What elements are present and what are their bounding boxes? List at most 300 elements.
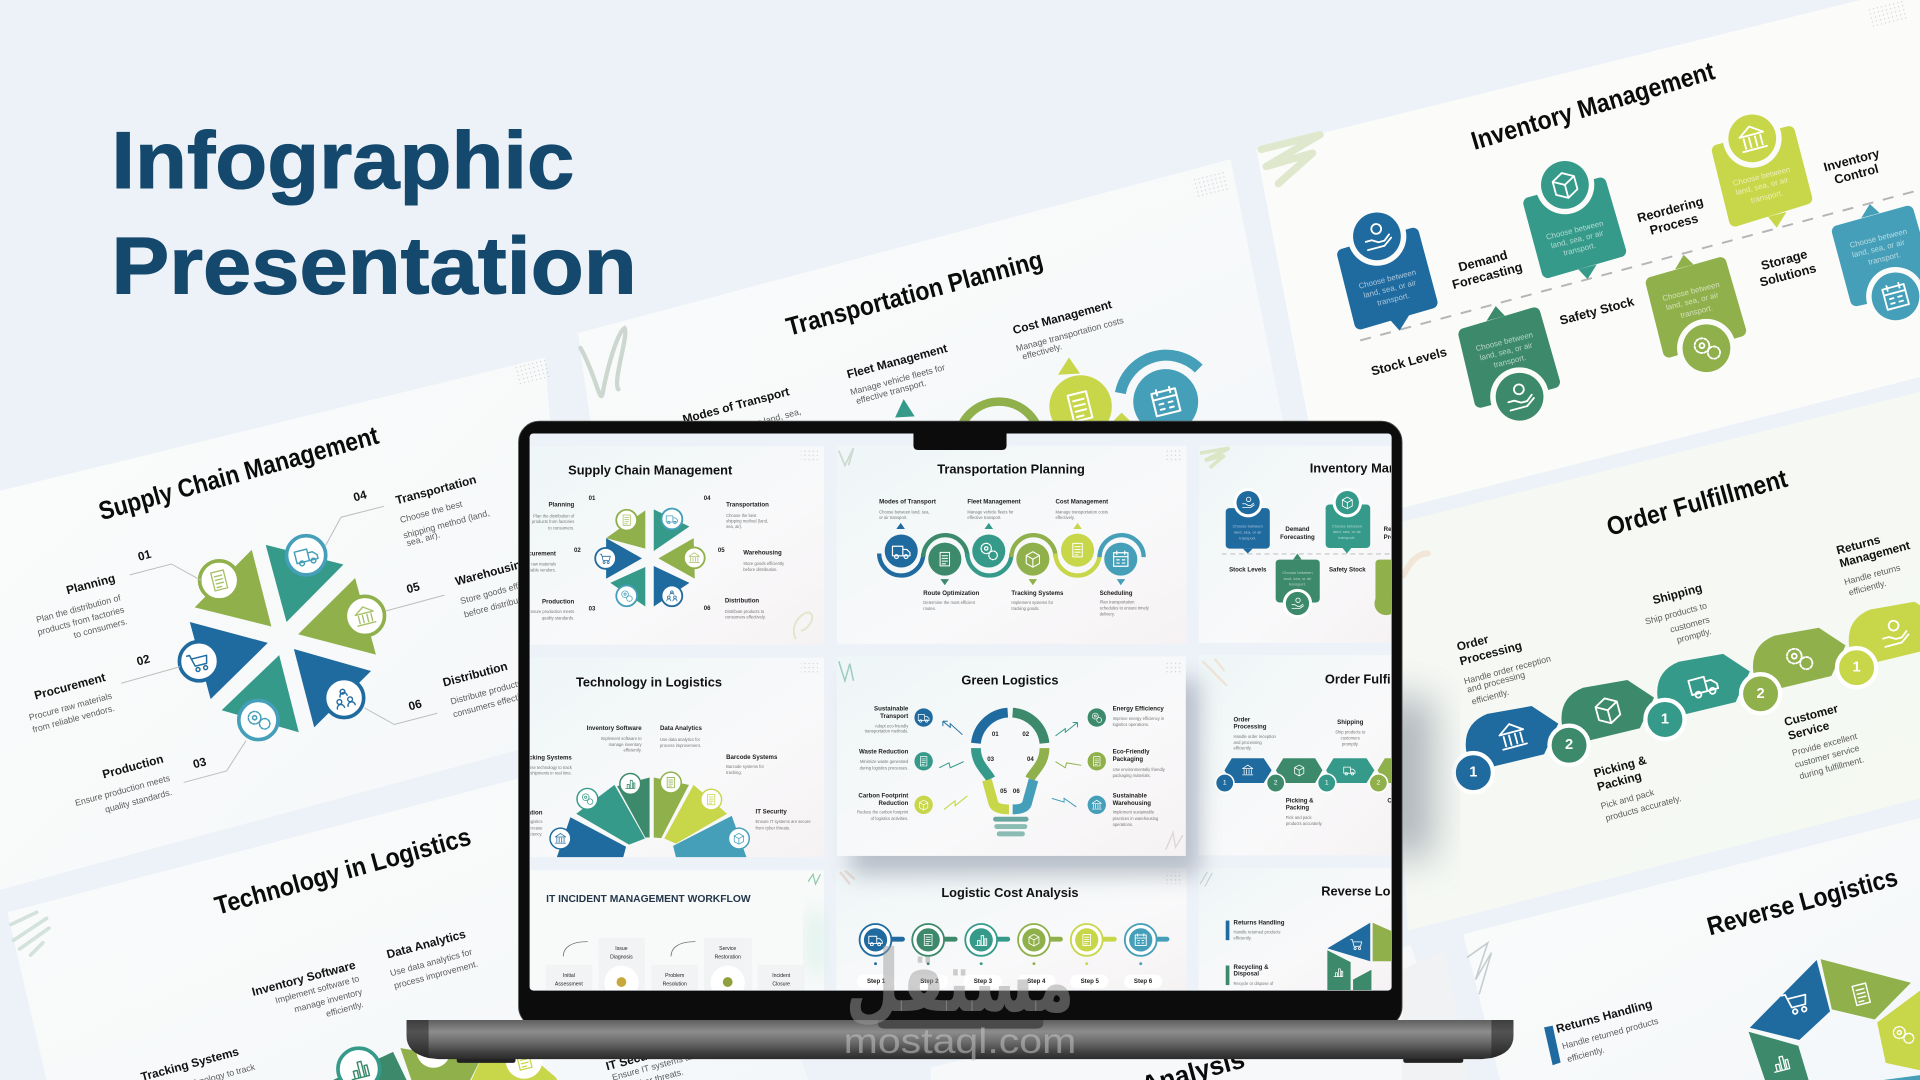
card labels: Storage [1759,246,1809,273]
labels: 04 [704,495,711,502]
top labels: Choose between land, sea, [879,509,930,514]
slide: logistic cost analysis [836,868,1187,993]
labels: promptly. [1342,741,1359,746]
step text: during fulfillment. [1798,754,1865,781]
item text: IT Security [604,1044,667,1073]
labels: from cyber threats. [756,825,790,830]
labels: right column: before distribution. [463,591,535,620]
labels: left column: 03 [191,754,208,771]
fan diagram segments [333,1033,557,1080]
labels: right column: Distribution [441,659,509,690]
laptop base notch [878,1020,1043,1029]
workflow boxes: Service [719,946,736,952]
labels: Safety Stock [1329,567,1366,574]
card: blue: land, sea, or air [1363,278,1417,300]
labels: Processing [1234,724,1267,731]
workflow boxes: Restoration [715,955,741,961]
workflow boxes: Closure [772,981,790,987]
heading: IT INCIDENT MANAGEMENT WORKFLOW [546,894,751,905]
camera notch [913,433,1007,450]
pale slide corner [1402,950,1469,1080]
step text: Order [1455,632,1490,654]
slide: technology in logistics [509,658,824,857]
card: lime: land, sea, or air [1735,175,1790,197]
top labels: Manage vehicle fleets for [967,509,1014,514]
labels: Barcode systems for [726,764,765,769]
labels: right column: 04 [352,487,369,504]
step text: products accurately. [1604,793,1682,823]
top labels: Modes of Transport [879,499,936,506]
labels: Plan the distribution of [533,513,575,518]
item text: Modes of Transport [681,384,791,426]
labels: Use technology to track [528,765,573,770]
heading: Transportation Planning [783,246,1046,342]
labels: Packing [1286,804,1309,811]
right labels: Improve energy efficiency in [1113,716,1165,721]
labels: Store goods efficiently [743,561,785,566]
step text: Management [1838,538,1912,570]
card: green [1652,255,1740,378]
hub [595,509,705,606]
labels: quality standards. [542,615,574,620]
labels: right column: Distribute products to [449,675,532,706]
bottom labels: Implement systems for [1011,600,1054,605]
panel: inventory management [1256,0,1920,527]
card labels: Process [1648,210,1700,238]
main title: Presentation [111,221,637,311]
labels: Handle order reception [1234,734,1277,739]
steps: Step 1 [867,978,886,985]
screen content [530,446,1392,990]
labels: Picking & [1286,797,1314,804]
top labels: Manage transportation costs [1056,509,1108,514]
cards [1222,488,1400,618]
right labels: Use environmentally friendly [1113,767,1166,772]
heading: Transportation Planning [937,461,1085,476]
step text: Returns [1835,532,1882,557]
fan [550,772,749,857]
labels: left column [28,547,208,815]
number badges: 1 [1852,660,1861,676]
labels: Use data analytics for [660,737,701,742]
cards: Choose between [1233,524,1263,529]
steps: Step 5 [1081,978,1100,985]
labels: left column: Production [101,752,165,781]
item text: efficiently. [325,999,364,1019]
bulb numbers: 04 [1027,756,1034,763]
hub of six triangles [190,545,376,732]
heading: Reverse Logistics [1704,864,1901,941]
card: green: Choose between [1661,280,1721,303]
left labels: transportation methods. [865,729,908,734]
labels: efficiency. [524,831,543,836]
hexagon segments [1749,959,1920,1080]
labels: before distribution. [743,567,777,572]
labels: Procurement [518,550,556,557]
slide: inventory management [1199,446,1392,643]
heading: Inventory Management [1310,461,1450,476]
labels: efficiently. [624,748,642,753]
labels: left column: Ensure production meets [74,773,172,808]
labels: Choose the best [726,513,757,518]
item text: Fleet Management [845,341,949,381]
card: blue [1343,207,1431,331]
bottom labels: schedules to ensure timely [1100,606,1150,611]
labels: left column: Procure raw materials [28,690,114,722]
top labels: Fleet Management [967,499,1021,506]
item text: Choose between land, sea, [697,406,802,444]
bottom labels: delivery. [1100,612,1115,617]
decorative scribble [580,328,625,396]
card: cyan [1838,204,1920,326]
labels: Forecasting [1280,534,1315,541]
step text: Ship products to [1644,600,1708,627]
item text: Cost Management [1011,297,1113,337]
step text: efficiently. [1848,578,1887,598]
item text: Manage transportation costs [1015,315,1125,353]
labels: Automation [509,810,543,817]
heading: Supply Chain Management [568,463,733,478]
hexagon [1327,923,1396,992]
steps [857,924,1167,988]
heading: Order Fulfillment [1604,465,1791,542]
step text: Packing [1595,769,1643,794]
list: Recycling & [1234,964,1269,971]
step text: efficiently. [1470,687,1510,707]
cards: Choose between [1332,524,1362,529]
labels: Stock Levels [1229,567,1267,574]
labels: Customer [1387,797,1416,804]
labels: left column: quality standards. [104,787,173,815]
card labels: Safety Stock [1558,293,1636,328]
chain: 2 [1274,780,1278,787]
labels: 05 [718,547,725,554]
card: lime: Choose between [1732,165,1791,188]
labels: IT Security [756,808,787,815]
laptop feet [457,1053,1463,1063]
labels: left column: Procurement [33,670,107,703]
labels: to increase [522,825,543,830]
labels: Tracking Systems [520,754,572,761]
workflow boxes: Resolution [663,981,687,987]
process chevrons [1466,602,1920,767]
step text: Handle returns [1843,562,1902,587]
right labels: practices in warehousing [1113,816,1159,821]
card: teal: Choose between [1545,219,1604,242]
bottom labels: Scheduling [1100,590,1133,597]
item text: Implement software to [274,973,360,1005]
item text: Manage vehicle fleets for [849,362,946,397]
labels: products from factories [532,519,574,524]
watermark [844,932,1076,1061]
bottom labels: routes. [923,606,936,611]
labels [509,725,811,836]
labels: Demand [1285,526,1310,533]
step text: Shipping [1651,581,1704,607]
icon circles [179,536,384,740]
list: Recycle or dispose of [1234,981,1274,986]
step text: Service [1786,718,1831,743]
chain [1216,758,1396,792]
heading: Logistic Cost Analysis [941,885,1079,900]
left labels: Minimize waste generated [860,759,909,764]
panel: logistic cost analysis [931,945,1457,1080]
slide: order fulfillment [1200,656,1391,855]
labels: 02 [574,547,581,554]
slide: it incident management workflow [530,870,824,1000]
left labels: Reduce the carbon footprint [857,809,909,814]
labels: Data Analytics [660,725,702,732]
labels: process improvement. [660,743,701,748]
heading: Green Logistics [961,673,1058,688]
number badges: 1 [1661,712,1669,728]
item text [681,297,1125,444]
slide: transportation planning [837,446,1187,644]
labels: left column: from reliable vendors. [31,703,116,735]
card labels: Reordering [1635,193,1705,225]
workflow boxes: Assessment [555,981,583,987]
cards: transport. [1338,535,1355,540]
workflow boxes: Incident [772,973,791,979]
card: dark green [1464,306,1554,426]
card labels: Demand [1457,247,1509,275]
returns handling item [1544,997,1660,1065]
slide: green logistics [837,656,1200,876]
labels: shipping method (land, [726,519,768,524]
chain: 2 [1377,780,1381,787]
chain: 1 [1325,780,1329,787]
labels: to consumers. [548,525,574,530]
labels: left column: 01 [136,547,153,564]
returns handling item: Returns Handling [1555,997,1654,1036]
labels [515,495,785,620]
workflow boxes: Issue [615,946,628,952]
left labels: Reduction [878,800,909,807]
left labels: Adopt eco-friendly [875,723,909,728]
returns handling item: efficiently. [1566,1044,1606,1064]
left labels: Waste Reduction [859,749,909,756]
card labels: Stock Levels [1369,344,1448,379]
right labels: packaging materials. [1113,773,1151,778]
labels: Ensure production meets [528,609,574,614]
labels: Barcode Systems [726,754,778,761]
labels: tracking. [726,770,742,775]
workflow boxes: Diagnosis [610,955,633,961]
item text: manage inventory [293,986,364,1014]
list: Returns Handling [1234,919,1285,926]
card: cyan: Choose between [1849,227,1908,250]
right labels: Energy Efficiency [1113,705,1164,712]
left labels [857,705,909,821]
right labels: Packaging [1113,756,1143,763]
labels: right column: Warehousing [454,556,529,588]
left labels: of logistics activities. [871,816,908,821]
labels [1234,717,1391,826]
card: cyan: land, sea, or air [1851,238,1906,259]
bulb numbers: 01 [992,731,999,738]
step text: Picking & [1592,753,1648,780]
left labels: Sustainable [874,705,909,712]
labels: 01 [589,495,596,502]
workflow boxes [554,941,790,987]
laptop base [407,1020,1513,1059]
labels: products accurately. [1286,821,1323,826]
cards: land, sea, or air [1234,530,1262,535]
labels: Transportation [726,501,769,508]
labels: consumers effectively. [725,615,766,620]
card: teal [1529,156,1620,279]
card: green: land, sea, or air [1665,290,1720,312]
step text: customers [1669,614,1711,635]
labels: right column: 06 [407,696,424,713]
right labels: Warehousing [1113,800,1151,807]
labels: left column: Planning [65,571,117,597]
labels: Production [542,598,575,605]
right labels: Eco-Friendly [1113,749,1150,756]
top labels: effective transport. [967,515,1001,520]
left labels: Transport [880,713,908,720]
list: Disposal [1234,971,1259,978]
card: dark green: transport. [1493,353,1527,370]
icon circles and arrows [914,708,1106,814]
bulb numbers: 03 [987,756,995,763]
laptop base end shading [407,1020,1513,1058]
card: blue: Choose between [1358,268,1417,291]
item text [139,927,698,1080]
laptop lid [519,421,1402,1027]
returns handling item: Handle returned products [1561,1016,1660,1051]
cards: transport. [1239,536,1256,541]
labels: sea, air). [726,524,742,529]
workflow boxes: Initial [563,973,575,979]
item text: Data Analytics [385,927,468,961]
heading: Reverse Logistics [1321,884,1431,899]
chain: 1 [1223,780,1227,787]
labels: Ship products to [1335,729,1366,734]
bottom labels: Tracking Systems [1011,590,1064,597]
list: efficiently. [1234,936,1252,941]
slide: supply chain management [515,446,824,645]
laptop [407,421,1513,1063]
bulb numbers: 02 [1022,731,1030,738]
bulb numbers: 05 [1000,788,1007,795]
main title [111,116,637,311]
item text: effectively. [1021,341,1063,362]
labels: right column: consumers effectively. [452,687,538,719]
item text: effective transport. [855,378,927,406]
labels: efficiently. [1234,745,1252,750]
labels: left column: products from factories [36,604,126,637]
card: cyan: transport. [1867,250,1902,267]
labels: Implement software to [601,736,642,741]
right labels [1113,705,1166,827]
bulb numbers [987,731,1034,795]
right labels: operations. [1113,822,1133,827]
labels: right column: Transportation [394,472,478,507]
labels: Use logistics [519,819,542,824]
cards: transport. [1289,581,1306,586]
labels: right column: shipping method (land, [402,508,491,540]
step text: Provide excellent [1791,731,1859,758]
bulb numbers: 06 [1013,788,1020,795]
step text: Processing [1458,638,1523,668]
decorative scribble [1403,553,1428,576]
heading: Order Fulfillment [1325,672,1429,687]
card: dark green: Choose between [1475,330,1534,353]
workflow boxes: Problem [665,973,684,979]
card: lime [1718,109,1806,228]
decorative scribble [11,912,49,955]
steps: Step 4 [1027,978,1046,985]
decorative scribble [1467,943,1491,994]
step text: promptly. [1676,626,1712,645]
cards: land, sea, or air [1333,529,1361,534]
labels: from reliable vendors. [516,567,556,572]
card: blue: transport. [1376,291,1411,308]
slide: reverse logistics [1199,868,1392,990]
steps: Step 3 [974,978,993,985]
labels: left column: to consumers. [72,616,128,640]
lightbulb [976,713,1044,809]
panel: reverse logistics [1463,818,1920,1080]
main title: Infographic [111,116,574,206]
card labels [1369,145,1881,379]
labels: and processing [1234,740,1262,745]
step text: customer service [1794,743,1860,770]
item text: Use data analytics for [389,947,473,978]
right labels: logistics operations. [1113,722,1149,727]
timeline [879,523,1144,585]
step text: and processing [1466,669,1526,695]
bottom labels: Plan transportation [1100,600,1135,605]
labels: Distribution [725,597,759,604]
bottom labels: Route Optimization [923,590,980,597]
list [1226,919,1285,986]
cards: land, sea, or air [1284,576,1312,581]
top labels: Cost Management [1056,499,1108,506]
labels: 06 [704,605,711,612]
step text: Pick and pack [1600,787,1656,811]
steps: Step 2 [920,978,939,985]
labels: right column [352,472,546,719]
card labels: Solutions [1758,260,1818,290]
labels: Inventory Software [587,725,642,732]
card: lime: transport. [1750,188,1784,205]
card: dark green: land, sea, or air [1479,340,1534,362]
labels: Reordering [1384,526,1417,533]
list: Handle returned products [1234,930,1280,935]
labels: shipments in real time. [530,771,572,776]
steps: Step 6 [1134,978,1153,985]
panel: supply chain management [0,358,576,891]
bottom labels: tracking goods. [1011,606,1040,611]
labels: Warehousing [743,550,782,557]
labels: Shipping [1337,719,1364,726]
labels: 03 [589,606,596,613]
card labels: Inventory [1822,145,1881,175]
labels: right column: sea, air). [405,530,441,548]
top labels: effectively. [1056,515,1075,520]
top labels [879,499,1108,520]
labels: Planning [548,502,575,509]
card: teal: transport. [1562,241,1597,258]
cards: Choose between [1282,570,1313,575]
labels: Ensure IT systems are secure [756,819,811,824]
panel: transportation planning [578,159,1286,490]
item text: Inventory Software [250,958,357,999]
labels: customers [1341,735,1360,740]
heading: Inventory Management [1468,57,1718,156]
